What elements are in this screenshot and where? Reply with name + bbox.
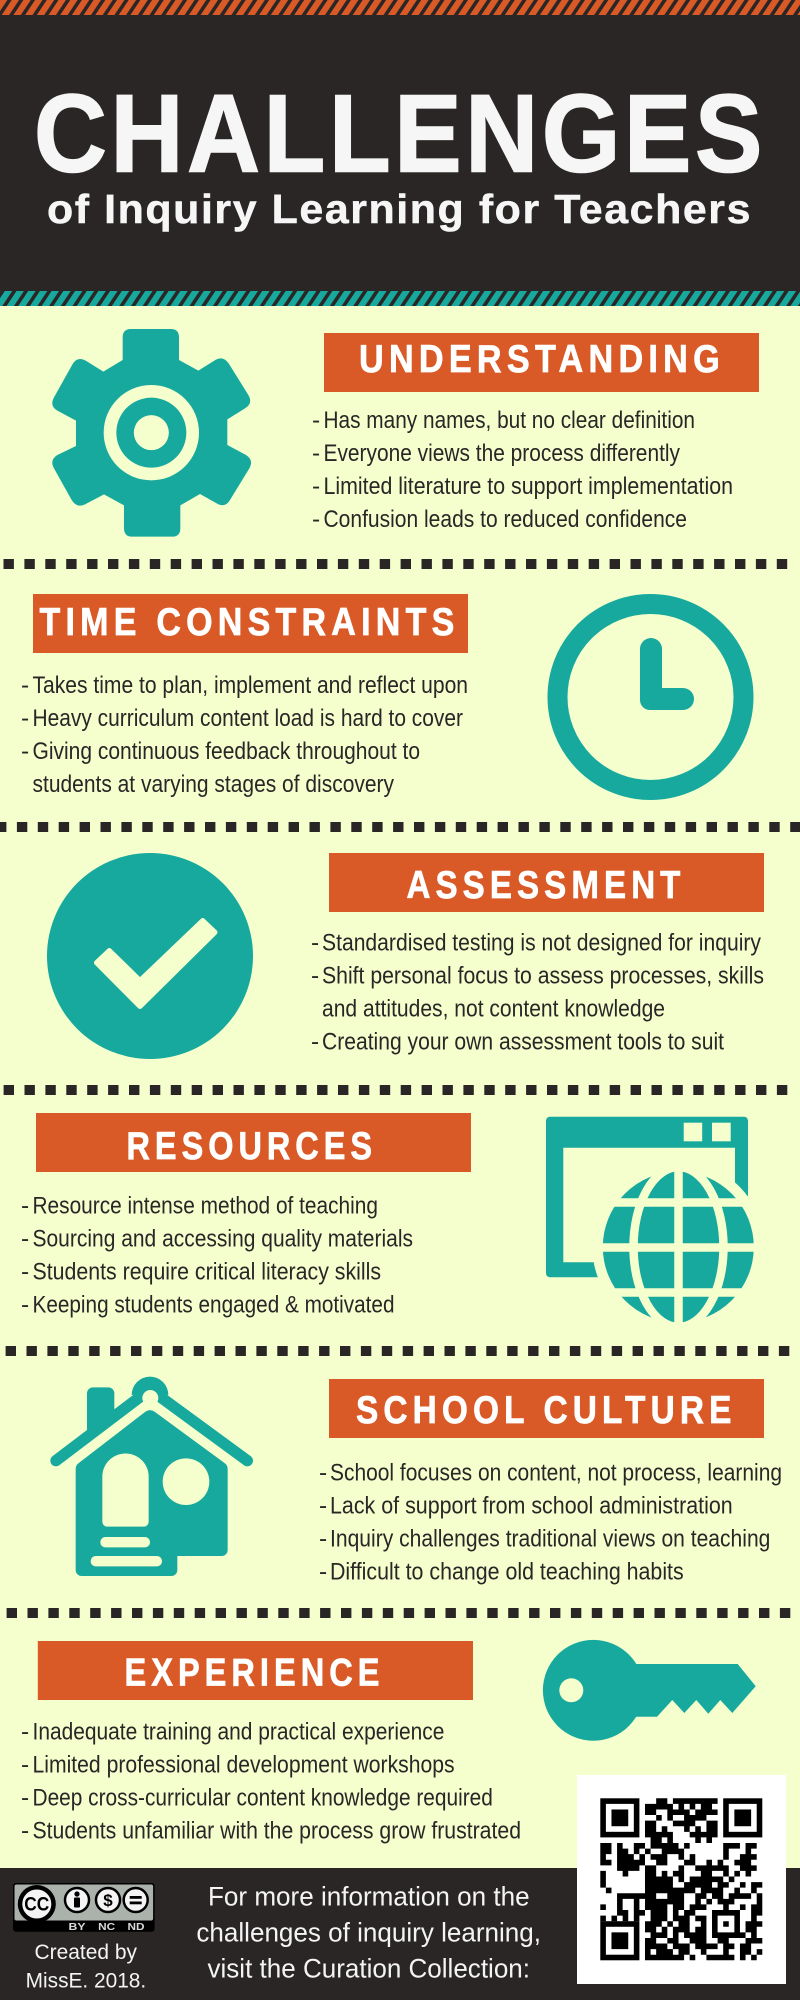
text: assessment bullets	[311, 930, 764, 1056]
text: credit: MissE. 2018.	[26, 1970, 146, 1992]
heading: resources	[36, 1113, 471, 1172]
text: school culture bullets: -	[319, 1492, 327, 1520]
text: resources bullets: Students require critical literacy skills	[32, 1258, 381, 1286]
text: time constraints bullets: Takes time to plan, implement and reflect upon	[32, 672, 468, 699]
icon: house	[56, 1377, 247, 1576]
panel: resources	[21, 1113, 770, 1333]
text: experience bullets	[21, 1718, 521, 1844]
text: school culture bullets: -	[319, 1460, 327, 1486]
text: school culture bullets: Difficult to change old teaching habits	[330, 1558, 684, 1586]
heading: time constraints	[33, 594, 468, 653]
text: resources bullets: Sourcing and accessing quality materials	[32, 1226, 413, 1252]
text: more information	[196, 1882, 541, 1984]
heading: understanding: UNDERSTANDING	[359, 338, 725, 381]
text: school culture bullets: Lack of support from school administration	[330, 1492, 733, 1520]
text: understanding bullets: Limited literature to support implementation	[324, 473, 733, 500]
text: experience bullets: -	[21, 1718, 29, 1745]
heading: assessment: ASSESSMENT	[406, 864, 686, 907]
text: school culture bullets	[319, 1460, 782, 1586]
text: understanding bullets	[312, 407, 733, 533]
heading: experience: EXPERIENCE	[124, 1652, 384, 1695]
text: understanding bullets: -	[312, 407, 320, 434]
text: resources bullets: Keeping students engaged & motivated	[32, 1292, 394, 1318]
icon: creative commons badge	[13, 1883, 155, 1933]
heading: experience	[38, 1641, 473, 1700]
heading: resources: RESOURCES	[126, 1125, 377, 1168]
text: resources bullets: -	[21, 1292, 29, 1318]
text: understanding bullets: -	[312, 506, 320, 533]
QR code	[577, 1775, 786, 1984]
icon: creative commons badge: NC	[98, 1921, 116, 1933]
text: time constraints bullets: Heavy curriculum content load is hard to cover	[32, 705, 463, 732]
text: resources bullets	[21, 1192, 413, 1318]
icon: creative commons badge: $	[103, 1891, 113, 1910]
text: assessment bullets: -	[311, 1028, 319, 1056]
heading: school culture	[329, 1379, 764, 1438]
icon: check circle	[47, 853, 253, 1059]
text: credit	[26, 1941, 146, 1992]
text: time constraints bullets: students at varying stages of discovery	[32, 771, 395, 798]
header banner	[0, 0, 800, 306]
text: assessment bullets: Creating your own assessment tools to suit	[322, 1028, 724, 1056]
icon: browser window and globe	[546, 1117, 770, 1333]
text: experience bullets: -	[21, 1751, 29, 1778]
text: experience bullets: Limited professional development workshops	[32, 1751, 455, 1778]
icon: creative commons badge: ND	[128, 1921, 145, 1933]
subtitle: of Inquiry Learning for Teachers	[47, 186, 752, 232]
text: understanding bullets: -	[312, 473, 320, 500]
text: experience bullets: -	[21, 1784, 29, 1811]
text: time constraints bullets: -	[21, 738, 29, 765]
icon: key	[543, 1640, 756, 1741]
heading: school culture: SCHOOL CULTURE	[356, 1389, 736, 1432]
text: resources bullets: Resource intense method of teaching	[32, 1192, 378, 1220]
text: school culture bullets: -	[319, 1558, 327, 1586]
text: experience bullets: Inadequate training and practical experience	[32, 1718, 444, 1745]
text: resources bullets: -	[21, 1258, 29, 1286]
text: experience bullets: -	[21, 1817, 29, 1844]
text: time constraints bullets: -	[21, 705, 29, 732]
heading: understanding	[324, 333, 759, 392]
text: resources bullets: -	[21, 1226, 29, 1252]
icon: clock	[558, 604, 744, 790]
text: assessment bullets: -	[311, 962, 319, 990]
text: understanding bullets: -	[312, 440, 320, 467]
panel: time constraints	[21, 594, 744, 798]
text: more information: challenges of inquiry learning,	[196, 1918, 541, 1948]
text: credit: Created by	[34, 1941, 138, 1964]
panel: school culture	[56, 1377, 782, 1586]
icon: creative commons badge: CC	[24, 1894, 50, 1916]
text: time constraints bullets: Giving continuous feedback throughout to	[32, 738, 420, 765]
text: experience bullets: Deep cross-curricular content knowledge required	[32, 1784, 493, 1811]
text: understanding bullets: Confusion leads to reduced confidence	[324, 506, 687, 533]
footer bar	[0, 1868, 800, 2000]
icon: creative commons badge: BY	[68, 1921, 86, 1933]
heading: assessment	[329, 853, 764, 912]
text: assessment bullets: -	[311, 930, 319, 956]
text: resources bullets: -	[21, 1192, 29, 1220]
icon: gear	[52, 329, 251, 537]
text: school culture bullets: -	[319, 1526, 327, 1552]
heading: time constraints: TIME CONSTRAINTS	[40, 601, 460, 644]
text: understanding bullets: Everyone views the process differently	[324, 440, 681, 467]
text: time constraints bullets: -	[21, 672, 29, 699]
text: more information: For more information on the	[208, 1882, 530, 1912]
panel: understanding	[52, 329, 759, 537]
text: understanding bullets: Has many names, but no clear definition	[324, 407, 695, 434]
text: time constraints bullets	[21, 672, 468, 798]
text: experience bullets: Students unfamiliar with the process grow frustrated	[32, 1817, 521, 1844]
panel: assessment	[47, 853, 764, 1059]
text: assessment bullets: and attitudes, not content knowledge	[322, 996, 665, 1022]
panel: experience	[21, 1640, 756, 1844]
text: more information: visit the Curation Collection:	[208, 1954, 530, 1984]
